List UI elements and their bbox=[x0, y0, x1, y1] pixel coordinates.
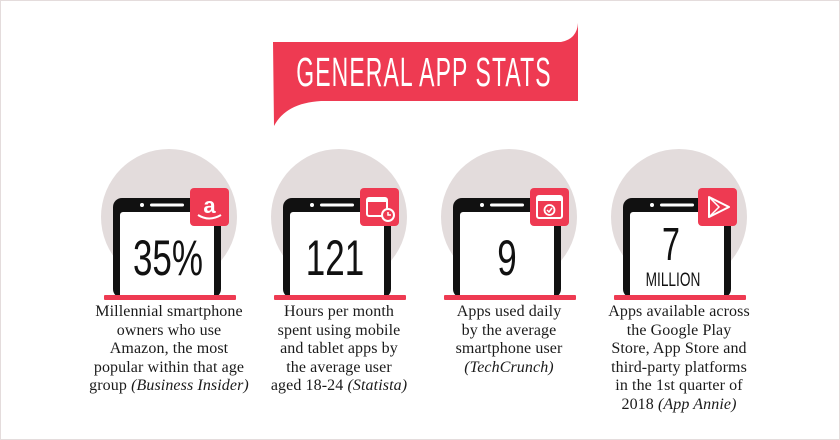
phone 4: 7 million: 7 bbox=[662, 219, 680, 270]
caption 3: (TechCrunch) bbox=[464, 358, 554, 376]
icon: calendar clock bbox=[360, 188, 399, 226]
phone 2: 121 bbox=[271, 149, 407, 300]
phone 1: 35%: 35% bbox=[133, 231, 203, 287]
icon: amazon: a bbox=[203, 193, 216, 218]
icon: calendar check bbox=[530, 188, 569, 226]
caption 4: Store, App Store and bbox=[611, 340, 747, 357]
caption 3: smartphone user bbox=[456, 340, 562, 357]
caption 3: by the average bbox=[462, 322, 556, 338]
caption 3: Apps used daily bbox=[457, 303, 561, 320]
caption 3 bbox=[456, 303, 562, 376]
caption 1: group (Business Insider) bbox=[89, 377, 249, 394]
phone 1: 35% bbox=[101, 149, 237, 300]
caption 4 bbox=[608, 303, 750, 412]
caption 2: Hours per month bbox=[284, 303, 394, 320]
caption 2: and tablet apps by bbox=[280, 340, 398, 357]
caption 1: owners who use bbox=[117, 322, 221, 338]
title banner: GENERAL APP STATS bbox=[296, 50, 552, 96]
caption 4: the Google Play bbox=[627, 322, 731, 338]
phone 4: 7 million: MILLION bbox=[646, 269, 700, 291]
phone 3: 9: 9 bbox=[497, 231, 517, 287]
caption 1 bbox=[89, 303, 249, 394]
caption 1: Amazon, the most bbox=[110, 340, 228, 357]
caption 1: Millennial smartphone bbox=[95, 303, 243, 320]
caption 4: third-party platforms bbox=[611, 358, 747, 376]
caption 2: the average user bbox=[286, 358, 392, 376]
caption 1: popular within that age bbox=[94, 358, 244, 376]
phone 2: 121: 121 bbox=[306, 231, 364, 287]
caption 4: Apps available across bbox=[608, 303, 750, 320]
caption 2: aged 18-24 (Statista) bbox=[271, 377, 407, 394]
phone 4: 7 million bbox=[611, 149, 747, 300]
title banner bbox=[273, 23, 578, 126]
caption 4: 2018 (App Annie) bbox=[621, 396, 737, 412]
caption 2 bbox=[271, 303, 407, 394]
icon: amazon bbox=[190, 188, 229, 226]
caption 2: spent using mobile bbox=[278, 322, 400, 338]
phone 3: 9 bbox=[441, 149, 577, 300]
icon: play store bbox=[698, 188, 737, 226]
caption 4: in the 1st quarter of bbox=[615, 377, 743, 394]
